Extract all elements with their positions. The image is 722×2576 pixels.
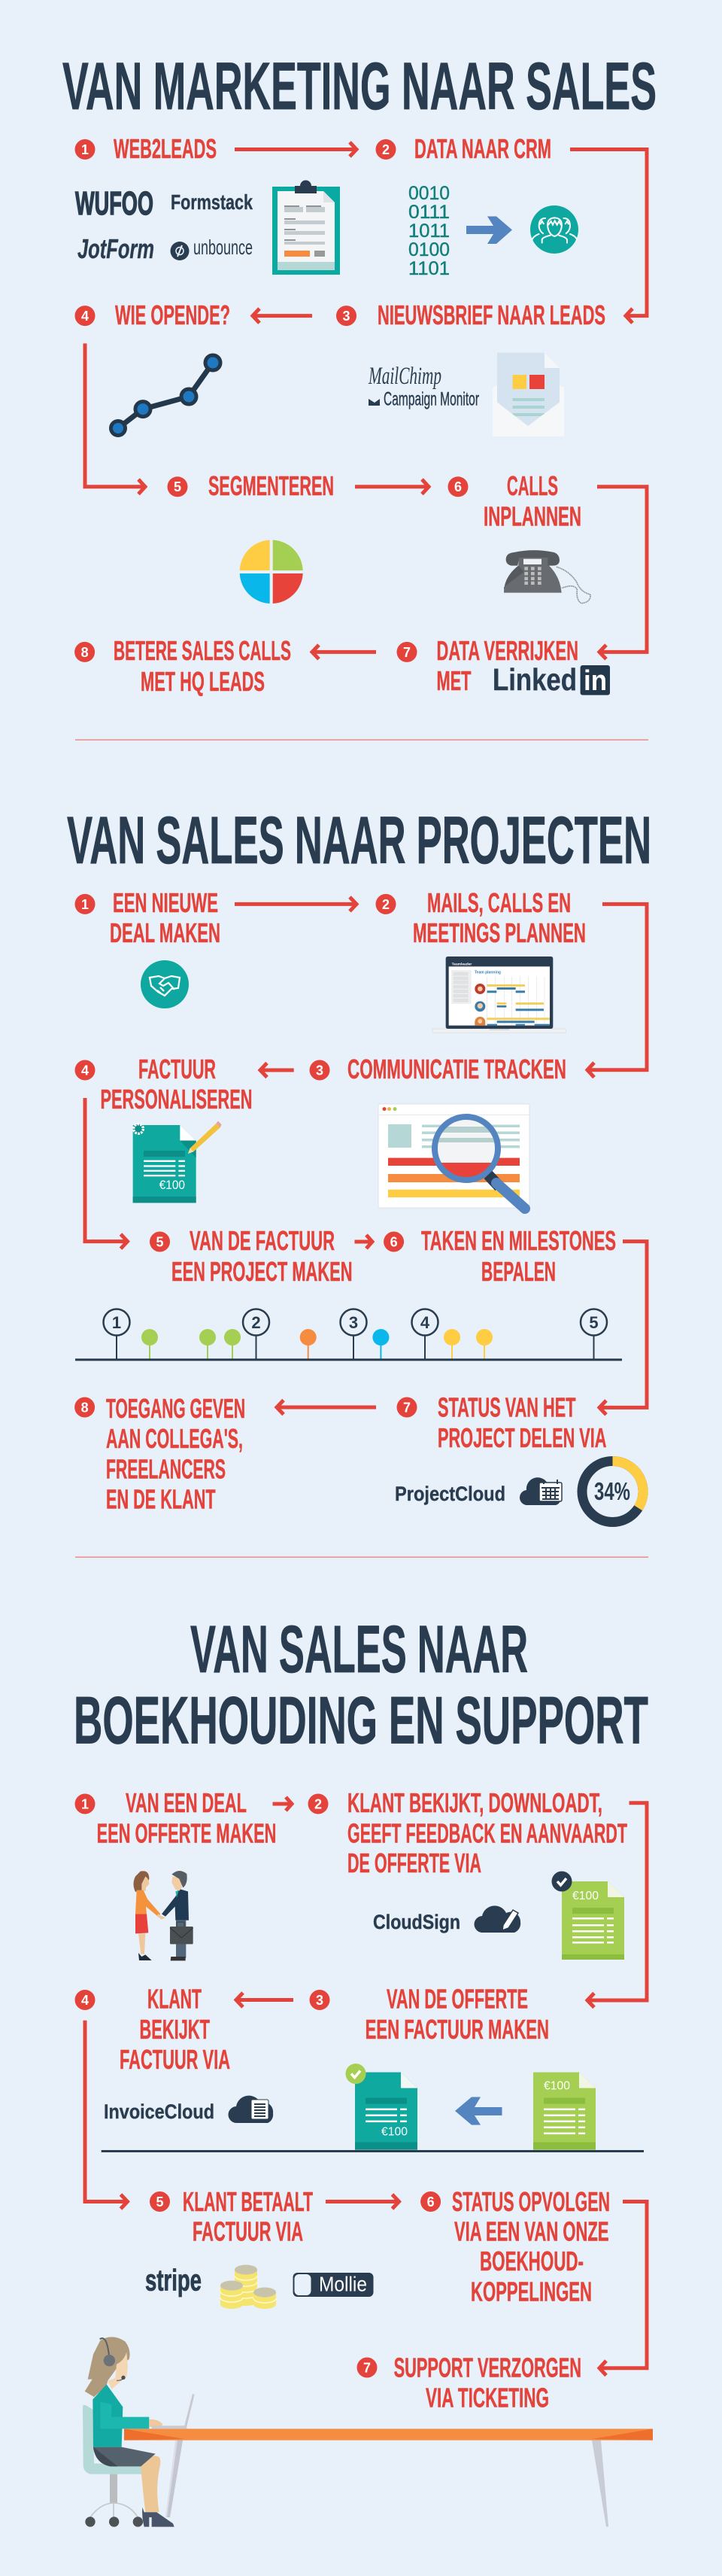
payment logos and coins [145, 2264, 373, 2309]
step 4: wie opende: 4 [81, 309, 89, 324]
arrow 1 to 2 [235, 142, 356, 157]
step 7: data verrijken met linkedin: in [584, 665, 607, 697]
step 1: een nieuwe deal maken: EEN NIEUWE [113, 887, 218, 918]
icon: blue arrow [466, 217, 512, 244]
step 7: support verzorgen via ticketing: VIA TICKETING [426, 2383, 549, 2413]
timeline with milestones: 4 [420, 1313, 430, 1332]
logo: mollie [293, 2273, 373, 2297]
support agent with chair [83, 2337, 195, 2527]
icon: laptop with team planning [432, 956, 566, 1033]
step 5: klant betaalt factuur via: KLANT BETAALT [183, 2186, 313, 2217]
icon: laptop with team planning: Teamleader [452, 962, 472, 966]
icon: browser with magnifier [378, 1104, 529, 1209]
step 2: data naar crm [376, 133, 551, 164]
step 4: klant bekijkt factuur via: BEKIJKT [140, 2014, 210, 2045]
step 6: calls inplannen: INPLANNEN [484, 501, 581, 532]
step 7: status van het project delen via [397, 1392, 606, 1453]
step 6: calls inplannen [448, 470, 581, 532]
step 5: segmenteren: 5 [174, 479, 181, 494]
icon: green offer document with check: €100 [572, 1890, 599, 1902]
step 2: klant bekijkt downloadt: DE OFFERTE VIA [347, 1848, 481, 1878]
step 4: factuur personaliseren [75, 1054, 253, 1115]
step 4: factuur personaliseren: PERSONALISEREN [101, 1084, 253, 1115]
donut chart: 34 percent [582, 1461, 643, 1522]
step 7: data verrijken met linkedin [397, 635, 610, 697]
form tool logos: JotForm [77, 233, 154, 264]
step 2: klant bekijkt downloadt: 2 [314, 1797, 322, 1812]
step 2: mails calls en meetings plannen: MAILS, CALLS EN [427, 887, 571, 918]
step 6: status opvolgen: BOEKHOUD- [480, 2246, 584, 2276]
section 3: van sales naar boekhouding en support [74, 1611, 653, 2527]
icon: green offer document: €100 [544, 2080, 570, 2093]
step 1: een nieuwe deal maken: 1 [81, 897, 89, 912]
illustration: support agent at desk [83, 2337, 653, 2527]
step 1: van een deal een offerte maken [75, 1787, 276, 1849]
arrow 1 to 2 [235, 897, 356, 911]
icon: green offer document [533, 2073, 596, 2150]
arrow 2 to 3 [587, 1803, 647, 2008]
arrow 6 to 7 [597, 487, 647, 659]
step 6: calls inplannen: CALLS [507, 470, 558, 501]
step 3: communicatie tracken: COMMUNICATIE TRACKEN [347, 1054, 566, 1084]
arrow 7 to 8 [277, 1400, 376, 1415]
step 5: klant betaalt factuur via: 5 [156, 2194, 164, 2210]
arrow 5 to 6 [355, 1235, 372, 1248]
step 7: data verrijken met linkedin: Linked [493, 662, 577, 697]
step 5: segmenteren: SEGMENTEREN [208, 470, 334, 501]
step 1: web2leads [75, 133, 217, 164]
arrow 5 to 6 [355, 479, 429, 494]
payment logos and coins: stripe [145, 2264, 202, 2298]
step 3: nieuwsbrief naar leads [336, 300, 605, 330]
arrow 4 to 5 [85, 1098, 128, 1248]
step 4: factuur personaliseren: FACTUUR [138, 1054, 216, 1084]
step 8: betere sales calls: MET HQ LEADS [141, 666, 265, 697]
arrow 2 to 3 [570, 149, 647, 323]
step 4: klant bekijkt factuur via: 4 [81, 1993, 89, 2008]
logo: projectcloud [395, 1477, 562, 1505]
illustration: two people shaking hands [133, 1871, 193, 1960]
step 7: data verrijken met linkedin: 7 [403, 645, 411, 660]
step 4: wie opende: WIE OPENDE? [115, 300, 230, 330]
step 8: toegang geven: 8 [81, 1400, 89, 1415]
binary data column: 0010 [408, 183, 450, 204]
step 3: van de offerte een factuur maken: 3 [316, 1993, 323, 2008]
step 8: betere sales calls [74, 635, 291, 697]
step 2: mails calls en meetings plannen: MEETINGS PLANNEN [413, 917, 586, 948]
icon: laptop with team planning: Team planning [475, 970, 501, 975]
step 5: van de factuur een project maken: 5 [156, 1234, 164, 1249]
step 6: status opvolgen: VIA EEN VAN ONZE [454, 2216, 609, 2247]
logo: invoicecloud [104, 2096, 273, 2123]
step 4: factuur personaliseren: 4 [81, 1063, 89, 1078]
step 6: taken en milestones bepalen: BEPALEN [481, 1256, 556, 1287]
step 6: status opvolgen: STATUS OPVOLGEN [452, 2186, 610, 2217]
section 1: van marketing naar sales [62, 48, 657, 697]
icon: teal invoice document with check: €100 [381, 2126, 408, 2139]
step 3: nieuwsbrief naar leads: 3 [342, 309, 350, 324]
newsletter tool logos: Campaign Monitor [384, 389, 479, 410]
form tool logos: WUFOO [75, 185, 153, 222]
icon: teal invoice document with check [346, 2064, 417, 2150]
step 6: status opvolgen: 6 [427, 2194, 435, 2210]
logo: mollie: Mollie [319, 2273, 367, 2295]
icon: clipboard form [272, 181, 340, 275]
step 6: status opvolgen: KOPPELINGEN [471, 2276, 592, 2307]
arrow 2 to 3 [587, 904, 647, 1078]
icon: invoice with pencil and gear [133, 1121, 222, 1203]
timeline with milestones [75, 1309, 622, 1361]
icon: green offer document with check [552, 1871, 624, 1960]
step 8: betere sales calls: 8 [81, 645, 89, 660]
logo: cloudsign: CloudSign [373, 1911, 460, 1933]
step 2: data naar crm: 2 [382, 142, 390, 157]
icon: invoice with pencil and gear: €100 [159, 1178, 185, 1192]
logo: projectcloud: ProjectCloud [395, 1483, 505, 1505]
step 4: klant bekijkt factuur via [75, 1984, 230, 2075]
timeline with milestones: 1 [112, 1313, 121, 1332]
step 1: van een deal een offerte maken: VAN EEN DEAL [126, 1787, 247, 1818]
arrow 4 to 5 [85, 2021, 128, 2209]
binary data column: 0100 [408, 239, 450, 260]
newsletter tool logos [368, 363, 479, 410]
step 5: klant betaalt factuur via: FACTUUR VIA [193, 2216, 303, 2247]
step 7: data verrijken met linkedin: MET [436, 665, 471, 696]
step 7: support verzorgen via ticketing: SUPPORT VERZORGEN [394, 2352, 581, 2383]
step 7: data verrijken met linkedin: DATA VERRIJKEN [436, 635, 578, 666]
desk legs [165, 2441, 608, 2527]
logo: invoicecloud: InvoiceCloud [104, 2100, 214, 2123]
step 3: van de offerte een factuur maken: VAN DE OFFERTE [387, 1984, 528, 2015]
step 1: web2leads: 1 [81, 142, 89, 157]
step 3: van de offerte een factuur maken: EEN FACTUUR MAKEN [366, 2014, 549, 2045]
step 2: mails calls en meetings plannen [376, 887, 586, 948]
step 3: communicatie tracken: 3 [316, 1063, 323, 1078]
binary data column: 1011 [408, 220, 450, 242]
step 1: web2leads: WEB2LEADS [114, 133, 217, 164]
timeline with milestones: 5 [589, 1313, 599, 1332]
binary data column [408, 183, 450, 279]
step 1: van een deal een offerte maken: EEN OFFERTE MAKEN [97, 1818, 276, 1849]
step 7: status van het project delen via: STATUS VAN HET [438, 1392, 576, 1422]
step 3: communicatie tracken [310, 1054, 566, 1084]
step 8: betere sales calls: BETERE SALES CALLS [114, 635, 291, 666]
logo: cloudsign [373, 1905, 520, 1933]
step 6: status opvolgen [420, 2186, 610, 2307]
step 4: wie opende [75, 300, 230, 330]
step 6: calls inplannen: 6 [454, 479, 462, 494]
step 6: taken en milestones bepalen [384, 1225, 616, 1287]
timeline with milestones: 3 [349, 1313, 358, 1332]
step 1: een nieuwe deal maken: DEAL MAKEN [110, 917, 220, 948]
step 3: van de offerte een factuur maken [310, 1984, 549, 2045]
step 5: segmenteren [167, 470, 334, 501]
step 8: toegang geven [74, 1393, 245, 1514]
step 2: data naar crm: DATA NAAR CRM [414, 133, 551, 164]
arrow 5 to 6 [326, 2194, 399, 2209]
arrow 3 to 4 [253, 309, 312, 323]
step 4: klant bekijkt factuur via: FACTUUR VIA [120, 2044, 230, 2075]
arrow 1 to 2 [272, 1797, 292, 1811]
step 7: status van het project delen via: PROJECT DELEN VIA [438, 1422, 606, 1453]
step 5: van de factuur een project maken [150, 1225, 352, 1287]
icon: blue left arrow [455, 2097, 502, 2125]
form tool logos: Formstack [171, 190, 253, 214]
step 1: van een deal een offerte maken: 1 [81, 1797, 89, 1812]
icon: team circle [530, 205, 578, 254]
binary data column: 1101 [408, 258, 450, 279]
icon: handshake [141, 960, 189, 1008]
arrow 3 to 4 [260, 1063, 294, 1078]
step 7: support verzorgen via ticketing: 7 [363, 2360, 371, 2375]
newsletter tool logos: MailChimp [368, 363, 441, 390]
icon: line chart [111, 355, 220, 435]
form tool logos: unbounce [193, 236, 253, 259]
binary data column: 0111 [408, 202, 450, 223]
section 2: van sales naar projecten [67, 802, 651, 1522]
step 8: toegang geven: TOEGANG GEVEN [106, 1393, 245, 1424]
step 4: klant bekijkt factuur via: KLANT [147, 1984, 202, 2015]
title: van sales naar boekhouding en support [74, 1611, 648, 1758]
step 2: mails calls en meetings plannen: 2 [382, 897, 390, 912]
step 7: support verzorgen via ticketing [356, 2352, 581, 2413]
icon: segment pie [240, 540, 303, 604]
timeline with milestones: 2 [251, 1313, 261, 1332]
icon: coin stacks [220, 2265, 276, 2309]
icon: newsletter envelope [493, 353, 564, 436]
arrow 4 to 5 [85, 343, 145, 494]
step 8: toegang geven: FREELANCERS [106, 1454, 226, 1484]
step 5: van de factuur een project maken: EEN PROJECT MAKEN [171, 1256, 352, 1287]
step 5: klant betaalt factuur via [150, 2186, 313, 2247]
desk top [124, 2428, 653, 2441]
step 8: toegang geven: EN DE KLANT [106, 1484, 216, 1514]
arrow 3 to 4 [236, 1993, 293, 2007]
step 7: status van het project delen via: 7 [403, 1400, 411, 1415]
step 6: taken en milestones bepalen: 6 [390, 1234, 398, 1249]
step 1: een nieuwe deal maken [75, 887, 220, 948]
step 2: klant bekijkt downloadt [308, 1787, 627, 1878]
form tool logos [75, 185, 253, 264]
step 5: van de factuur een project maken: VAN DE FACTUUR [190, 1225, 335, 1256]
icon: telephone [504, 550, 590, 604]
donut chart: 34 percent: 34% [594, 1477, 630, 1505]
arrow 6 to 7 [599, 2202, 647, 2375]
arrow 7 to 8 [312, 645, 376, 659]
arrow 6 to 7 [599, 1242, 647, 1415]
step 8: toegang geven: AAN COLLEGA'S, [106, 1423, 243, 1454]
